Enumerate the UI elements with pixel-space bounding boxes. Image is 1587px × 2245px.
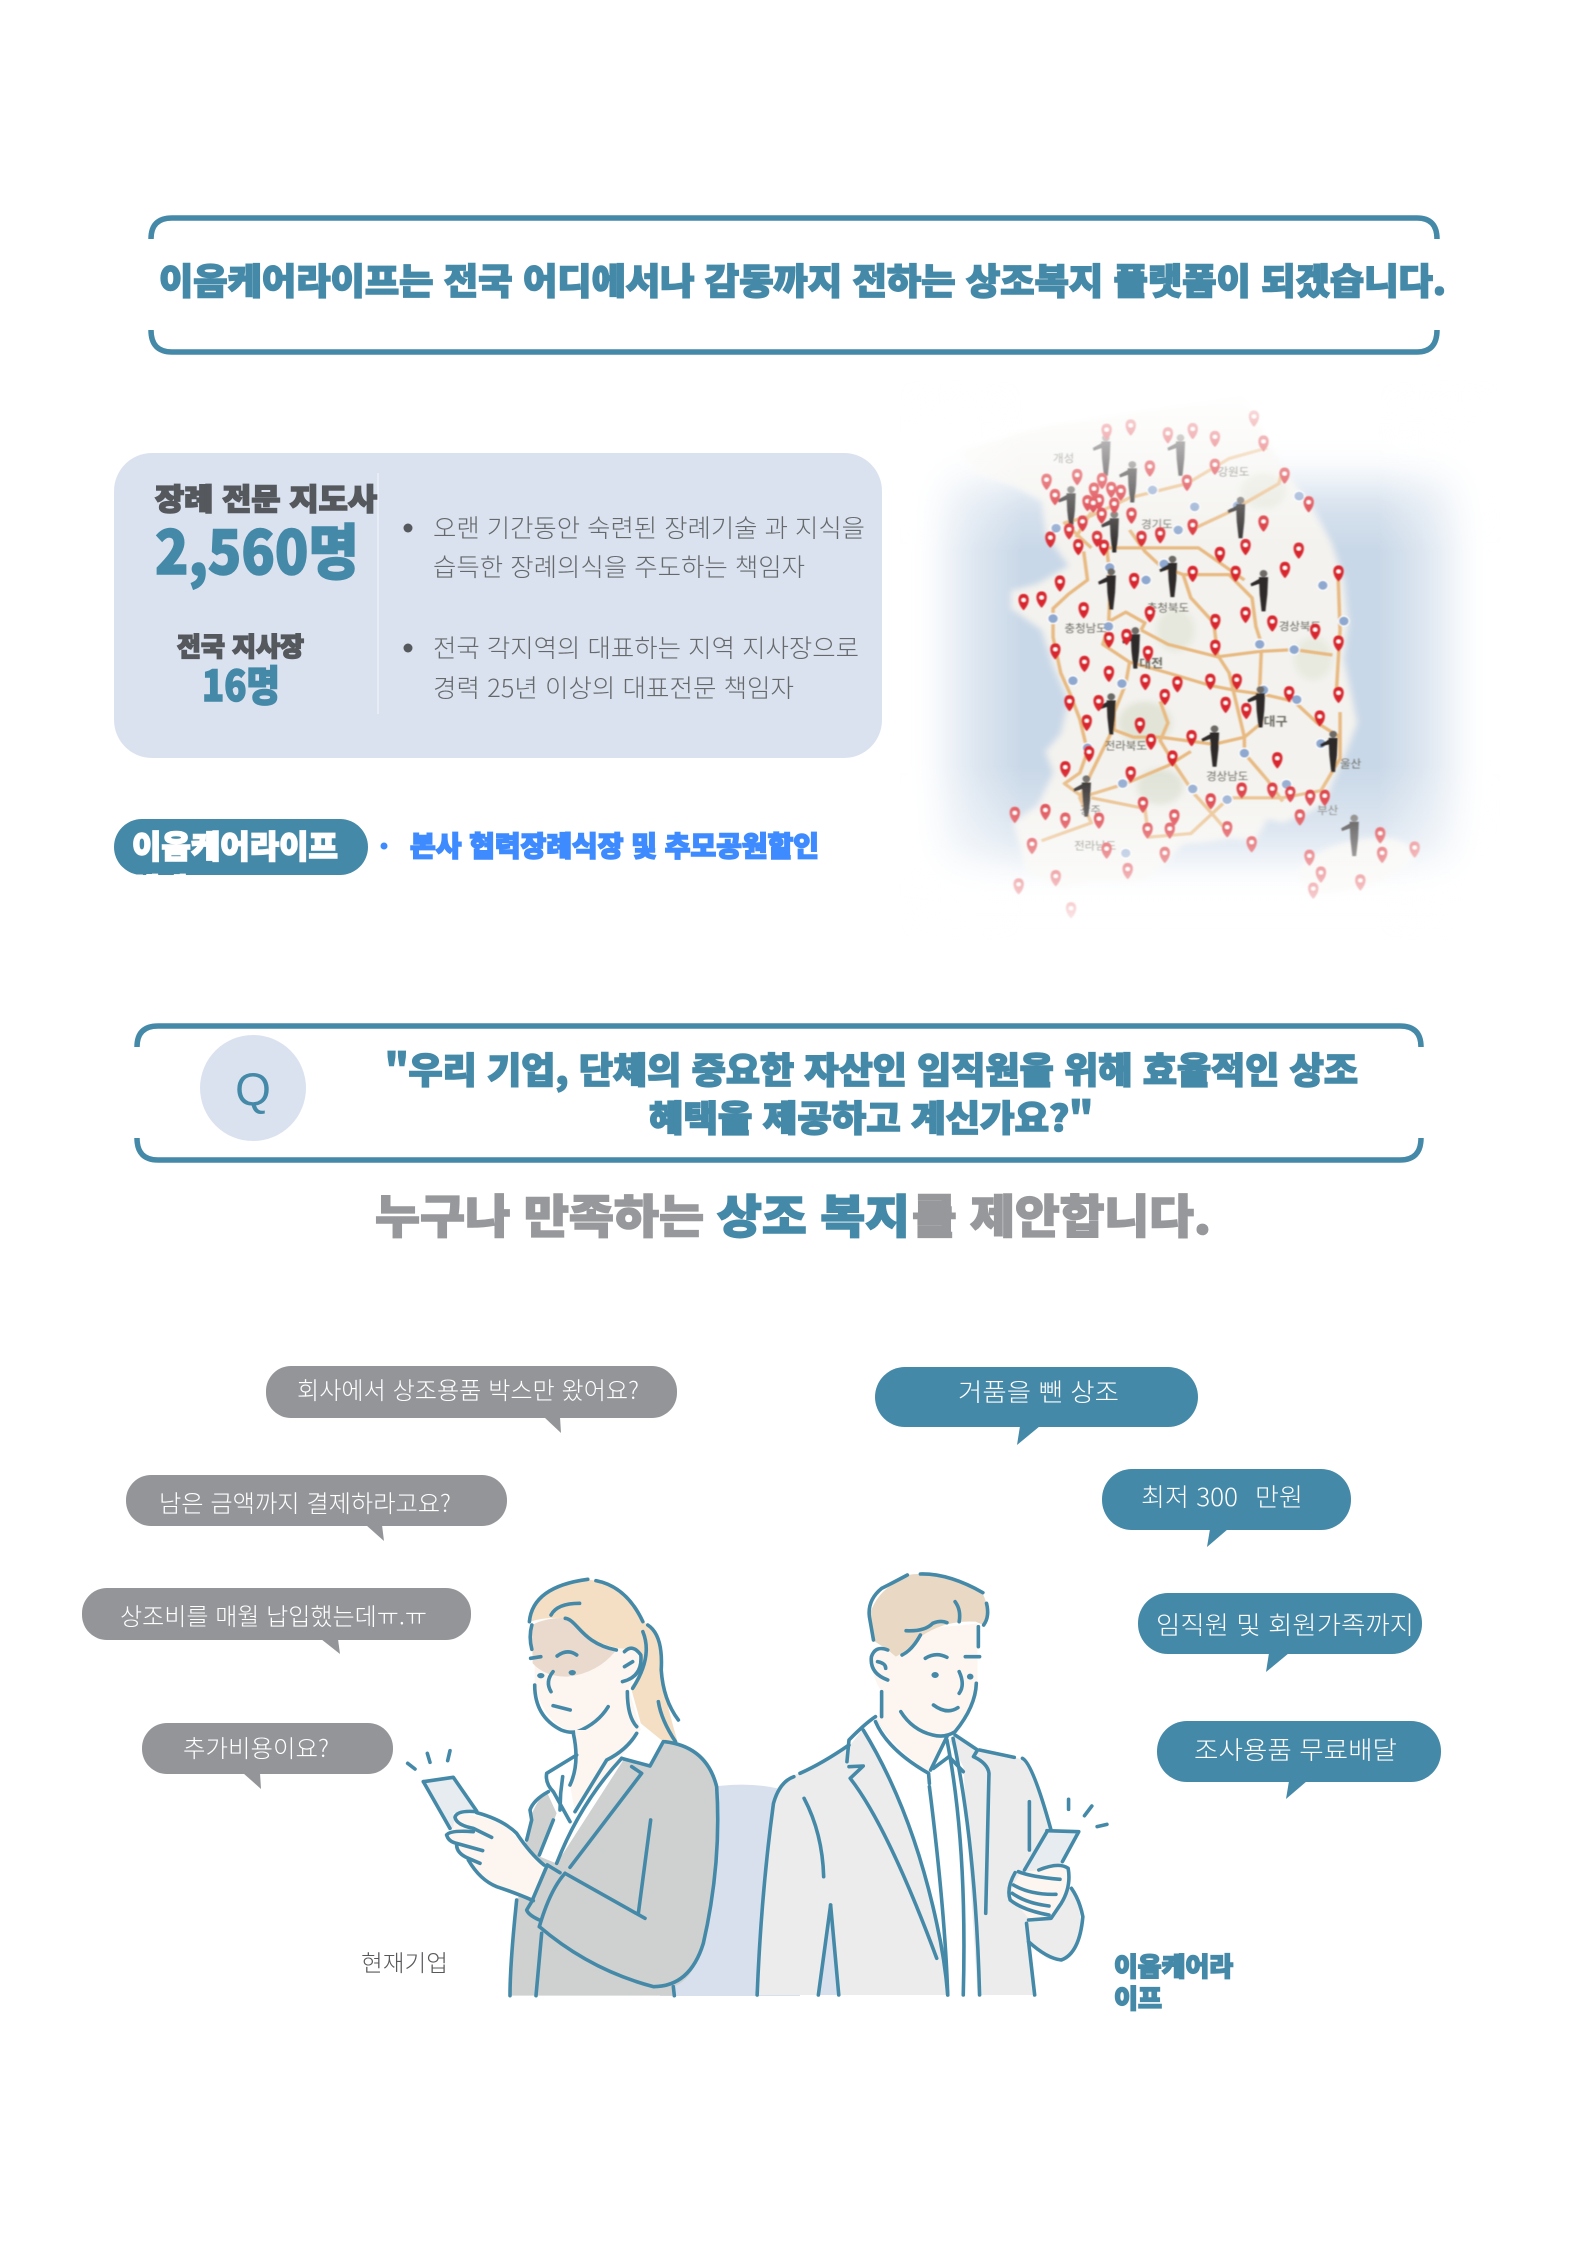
map of South Korea with branch pins: 전라남도 <box>1074 838 1116 854</box>
pill label and discount note: 체계 <box>132 865 187 909</box>
map of South Korea with branch pins: 충청남도 <box>1065 620 1107 636</box>
panel: funeral director stats: 장례 전문 지도사 <box>155 475 377 519</box>
panel: funeral director stats <box>114 453 882 758</box>
speech bubble: minimum price <box>1102 1469 1351 1547</box>
top banner frame and headline: 이음케어라이프는 전국 어디에서나 감동까지 전하는 상조복지 플랫폼이 되겠습니다. <box>159 253 1446 305</box>
section heading: 상조 복지 <box>717 1181 910 1247</box>
panel: funeral director stats: 2,560명 <box>155 505 359 592</box>
panel: funeral director stats: 16명 <box>202 653 280 714</box>
question banner frame: 혜택을 제공하고 계신가요?" <box>649 1090 1093 1142</box>
panel: funeral director stats: 오랜 기간동안 숙련된 장례기술 과 지식을 <box>433 509 865 545</box>
speech bubble: employees and family: 임직원 및 회원가족까지 <box>1156 1606 1414 1642</box>
label: current company: 현재기업 <box>361 1944 448 1978</box>
map of South Korea with branch pins: 경상북도 <box>1279 618 1321 634</box>
speech bubble: minimum price: 최저 300 <box>1141 1478 1238 1514</box>
pill label and discount note: 이음케어라이프 <box>132 822 338 868</box>
map of South Korea with branch pins: 강원도 <box>1218 464 1249 480</box>
speech bubble: no bubble funeral <box>875 1367 1198 1445</box>
section heading: 를 제안합니다. <box>912 1181 1211 1247</box>
speech bubble: remaining amount <box>126 1475 507 1541</box>
question banner frame: Q <box>235 1063 271 1115</box>
question banner frame <box>137 1026 1421 1160</box>
illustration: woman looking at phone <box>408 1579 718 1996</box>
map of South Korea with branch pins: 부산 <box>1317 802 1338 818</box>
speech bubble: minimum price: 만원 <box>1255 1478 1303 1514</box>
section heading: 누구나 만족하는 <box>375 1181 704 1247</box>
map of South Korea with branch pins: 개성 <box>1053 451 1074 466</box>
panel: funeral director stats: 전국 지사장 <box>177 627 304 664</box>
map of South Korea with branch pins: 대구 <box>1264 711 1288 730</box>
label: Ieum Care Life: 이프 <box>1114 1979 1162 2016</box>
map of South Korea with branch pins: 울산 <box>1340 756 1361 771</box>
speech bubble: box only: 회사에서 상조용품 박스만 왔어요? <box>297 1371 639 1406</box>
map of South Korea with branch pins: 전라북도 <box>1105 738 1147 754</box>
map of South Korea with branch pins: 대전 <box>1139 653 1163 671</box>
speech bubble: free delivery <box>1157 1721 1441 1799</box>
infographic canvas <box>82 215 1464 2012</box>
map of South Korea with branch pins: 충청북도 <box>1147 600 1189 615</box>
map of South Korea with branch pins <box>934 410 1464 918</box>
label: Ieum Care Life: 이음케어라 <box>1114 1947 1233 1984</box>
pill label and discount note <box>114 819 818 875</box>
section heading <box>375 1181 1211 1247</box>
pill label and discount note: 본사 협력장례식장 및 추모공원할인 <box>410 825 819 865</box>
speech bubble: box only <box>266 1366 677 1433</box>
speech bubble: no bubble funeral: 거품을 뺀 상조 <box>958 1373 1119 1409</box>
panel: funeral director stats: 전국 각지역의 대표하는 지역 지사장으로 <box>433 629 859 665</box>
speech bubble: extra cost: 추가비용이요? <box>183 1729 329 1764</box>
speech bubble: monthly payment <box>82 1588 471 1654</box>
top banner frame and headline <box>151 218 1446 352</box>
speech bubble: monthly payment: 상조비를 매월 납입했는데ㅠ.ㅠ <box>120 1597 427 1632</box>
panel: funeral director stats: 습득한 장례의식을 주도하는 책임자 <box>433 548 805 584</box>
illustration background shape <box>660 1785 800 1996</box>
map of South Korea with branch pins: 경기도 <box>1141 517 1173 532</box>
speech bubble: remaining amount: 남은 금액까지 결제하라고요? <box>159 1484 451 1519</box>
map of South Korea with branch pins: 경상남도 <box>1206 768 1248 784</box>
speech bubble: free delivery: 조사용품 무료배달 <box>1194 1731 1397 1767</box>
question banner frame: "우리 기업, 단체의 중요한 자산인 임직원을 위해 효율적인 상조 <box>385 1042 1358 1094</box>
speech bubble: employees and family <box>1138 1593 1422 1672</box>
illustration: man looking at phone <box>757 1574 1107 1995</box>
speech bubble: extra cost <box>142 1723 393 1789</box>
label: Ieum Care Life <box>1114 1947 1233 2016</box>
panel: funeral director stats: 경력 25년 이상의 대표전문 책임자 <box>433 669 794 705</box>
map of South Korea with branch pins: 광주 <box>1080 802 1101 818</box>
